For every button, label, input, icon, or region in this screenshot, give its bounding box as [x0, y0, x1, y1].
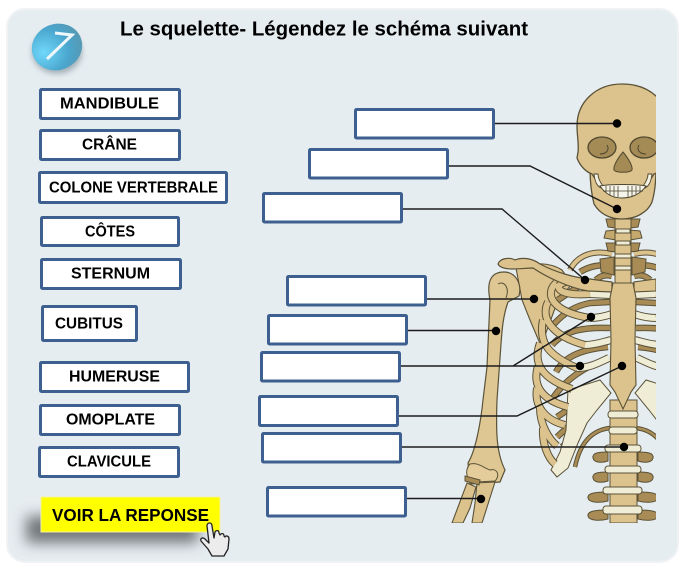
humerus: [468, 272, 520, 484]
title: Le squelette- Légendez le schéma suivant: [120, 18, 528, 40]
cranium: [576, 83, 656, 179]
label: CUBITUS: CUBITUS: [55, 316, 123, 332]
icon: number 7 badge: [25, 16, 89, 78]
button: voir la reponse: VOIR LA REPONSE: [52, 505, 209, 525]
answer box 3: [264, 194, 402, 222]
label: HUMERUSE: HUMERUSE: [69, 368, 160, 386]
sternum: [610, 283, 636, 409]
answer box 6: [262, 352, 400, 381]
icon: hand cursor: [201, 523, 229, 556]
label: CÔTES: [42, 218, 178, 246]
label: CRÂNE: CRÂNE: [82, 134, 137, 154]
ribs right: [632, 218, 656, 521]
label: CUBITUS: [42, 306, 136, 340]
answer box 9: [268, 488, 406, 516]
label: STERNUM: STERNUM: [71, 266, 150, 282]
answer box 5: [268, 316, 406, 344]
ribs left: [536, 219, 616, 520]
fangs: [594, 174, 652, 188]
answer box 1: [356, 110, 494, 138]
label: CLAVICULE: CLAVICULE: [67, 454, 151, 470]
label: CRÂNE: [40, 130, 180, 160]
label: CÔTES: CÔTES: [85, 222, 135, 240]
elbow joint: [465, 464, 498, 485]
teeth: [600, 184, 646, 198]
label: STERNUM: [42, 260, 180, 288]
scapula: [516, 264, 572, 346]
answer box 8: [262, 434, 400, 462]
answer box 2: [310, 150, 448, 178]
button: voir la reponse: [26, 497, 220, 543]
label: OMOPLATE: [40, 406, 180, 434]
label: OMOPLATE: OMOPLATE: [66, 412, 155, 428]
forearm bones: [452, 482, 495, 523]
skull: [576, 83, 656, 220]
illustration: skeleton: [452, 83, 656, 523]
acromion and clavicle: [498, 258, 656, 292]
label: COLONE VERTEBRALE: [40, 172, 226, 202]
spine: [603, 219, 642, 523]
answer box 4: [288, 276, 426, 305]
jaw: [590, 168, 656, 219]
label: MANDIBULE: [40, 90, 180, 118]
label: HUMERUSE: [40, 362, 188, 392]
label: CLAVICULE: [40, 448, 178, 476]
label: COLONE VERTEBRALE: COLONE VERTEBRALE: [49, 180, 218, 196]
label: MANDIBULE: MANDIBULE: [60, 96, 159, 112]
answer box 7: [260, 396, 398, 426]
leader lines and dots: [399, 119, 628, 503]
